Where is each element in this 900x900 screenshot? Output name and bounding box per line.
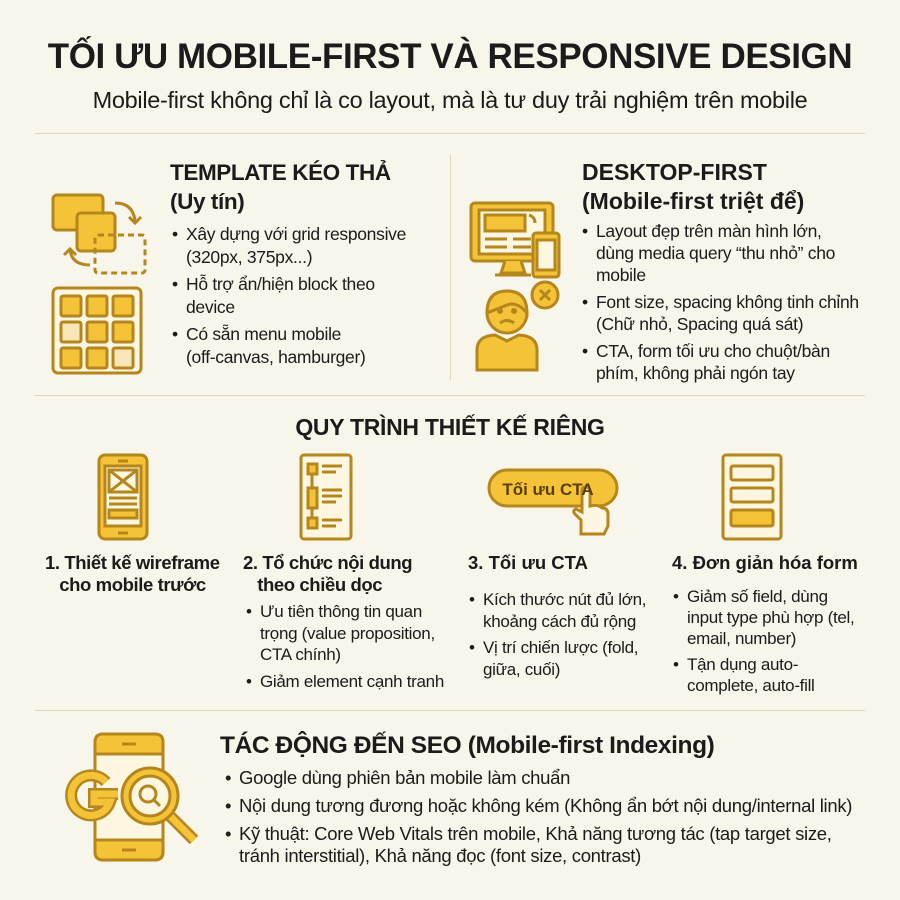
bullets: SEO [226, 767, 852, 866]
bullets: SEO: Google dùng phiên bản mobile làm chuẩn [239, 767, 570, 788]
bullets: step 4 [674, 587, 854, 695]
subtitle: Mobile-first không chỉ là co layout, mà là tư duy trải nghiệm trên mobile [93, 87, 807, 113]
bullets: desktop-first: mobile [596, 265, 646, 285]
icon: monitor and sad user [470, 202, 560, 372]
step 2 [243, 454, 444, 690]
bullets: step 2: CTA chính) [260, 645, 341, 664]
icon: drag blocks [52, 194, 146, 374]
title: step 1 [45, 552, 220, 595]
bullets: step 3: giữa, cuối) [483, 660, 560, 678]
icon: vertical content [300, 454, 352, 540]
bullets: step 3: Vị trí chiến lược (fold, [483, 638, 638, 657]
icon: phone with G and magnifier [65, 732, 198, 862]
bullets: step 4: Tận dụng auto- [687, 655, 798, 674]
panel: desktop-first [470, 159, 859, 383]
icon: phone wireframe [98, 454, 148, 540]
step 1 [45, 454, 220, 595]
title: step 3: 3. Tối ưu CTA [468, 552, 588, 573]
heading: template: TEMPLATE KÉO THẢ [170, 160, 391, 185]
heading: desktop-first: (Mobile-first triệt để) [582, 188, 804, 214]
bullets: SEO: Kỹ thuật: Core Web Vitals trên mobile, Khả năng tương tác (tap target size, [239, 823, 832, 844]
bullets: step 2: Ưu tiên thông tin quan [260, 602, 422, 621]
bullets: desktop-first: (Chữ nhỏ, Spacing quá sát) [596, 314, 803, 334]
bullets: step 4: input type phù hợp (tel, [687, 608, 854, 627]
icon: form [722, 454, 782, 540]
bullets: template: Hỗ trợ ẩn/hiện block theo [186, 274, 375, 294]
title: step 2: theo chiều dọc [257, 574, 382, 595]
title: TỐI ƯU MOBILE-FIRST VÀ RESPONSIVE DESIGN [48, 37, 852, 76]
bullets: template [172, 224, 406, 366]
title: step 2 [243, 552, 412, 595]
title: step 1: 1. Thiết kế wireframe [45, 552, 220, 573]
bullets: template: (320px, 375px...) [186, 246, 312, 266]
bullets: desktop-first: Font size, spacing không tinh chỉnh [596, 292, 859, 312]
bullets: SEO: Nội dung tương đương hoặc không kém (Không ẩn bớt nội dung/internal link) [239, 795, 852, 816]
icon: CTA button [488, 468, 618, 536]
bullets: desktop-first [582, 221, 859, 383]
heading: process: QUY TRÌNH THIẾT KẾ RIÊNG [295, 414, 605, 440]
title: step 4: 4. Đơn giản hóa form [672, 552, 858, 573]
bullets: step 2: Giảm element cạnh tranh [260, 672, 444, 690]
step 4 [672, 454, 858, 695]
bullets: step 3 [470, 590, 646, 678]
bullets: template: (off-canvas, hamburger) [186, 346, 366, 366]
bullets: SEO: tránh interstitial), Khả năng đọc (font size, contrast) [239, 845, 641, 866]
bullets: step 4: complete, auto-fill [687, 676, 815, 695]
icon: CTA button: Tối ưu CTA [502, 480, 594, 499]
bullets: desktop-first: Layout đẹp trên màn hình lớn, [596, 221, 822, 241]
heading: desktop-first [582, 159, 804, 214]
panel: SEO [65, 731, 852, 866]
bullets: step 3: khoảng cách đủ rộng [483, 612, 636, 630]
bullets: step 3: Kích thước nút đủ lớn, [483, 590, 646, 609]
bullets: desktop-first: dùng media query “thu nhỏ” cho [596, 243, 835, 263]
bullets: step 4: email, number) [687, 629, 796, 648]
title: step 2: 2. Tổ chức nội dung [243, 552, 412, 573]
bullets: template: Có sẵn menu mobile [186, 324, 341, 344]
heading: template: (Uy tín) [170, 189, 244, 214]
bullets: step 2: trọng (value proposition, [260, 624, 435, 642]
bullets: desktop-first: CTA, form tối ưu cho chuột/bàn [596, 341, 830, 361]
heading: template [170, 160, 391, 214]
bullets: template: device [186, 296, 235, 316]
bullets: desktop-first: phím, không phải ngón tay [596, 363, 795, 383]
bullets: step 4: Giảm số field, dùng [687, 587, 828, 606]
step 3 [468, 468, 646, 678]
panel: template [52, 160, 406, 374]
title: step 1: cho mobile trước [59, 574, 206, 595]
bullets: step 2 [246, 602, 444, 690]
bullets: template: Xây dựng với grid responsive [186, 224, 406, 244]
heading: desktop-first: DESKTOP-FIRST [582, 159, 767, 185]
heading: SEO: TÁC ĐỘNG ĐẾN SEO (Mobile-first Indexing) [220, 732, 714, 759]
